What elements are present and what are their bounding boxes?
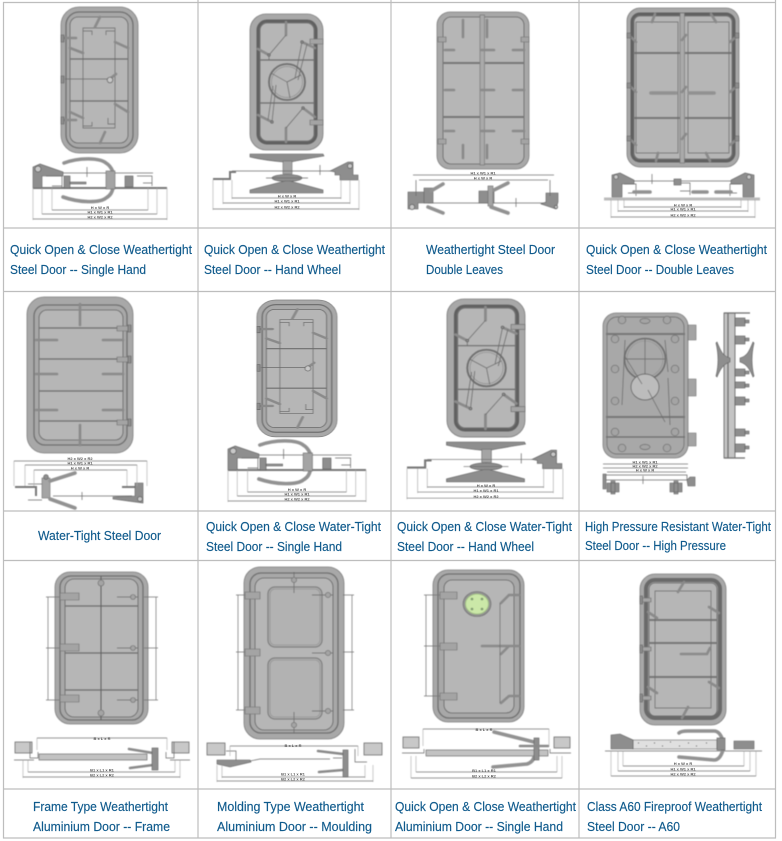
drawing: double leaf door elevation	[437, 12, 529, 169]
caption	[585, 519, 771, 553]
dimension labels: H1 x W1 x R1	[470, 170, 496, 176]
cell: class A60 fireproof	[587, 574, 762, 834]
dimension labels: H2 x W2 x R2	[473, 494, 499, 499]
dimension labels: H2 x W2 x R2	[67, 456, 93, 461]
caption: Quick Open & Close Weathertight	[10, 242, 192, 257]
dimension labels: H1 x W1 x R1	[67, 460, 93, 466]
caption: Quick Open & Close Weathertight	[395, 799, 576, 814]
dimension labels	[470, 170, 496, 180]
drawing: quick double leaf section	[604, 173, 760, 218]
dimension labels: H1 x W1 x R1	[473, 488, 499, 493]
dimension labels: H x W x R	[288, 487, 306, 492]
dimension labels: B2 x L2 x R2	[90, 772, 115, 778]
dimension labels: H x W x R	[674, 202, 692, 208]
dimension labels: B x L x R	[93, 736, 111, 741]
dimension labels	[67, 456, 93, 470]
drawing: aluminium single hand section	[402, 729, 571, 778]
caption: Steel Door -- Single Hand	[10, 262, 146, 277]
caption: Class A60 Fireproof Weathertight	[587, 799, 762, 814]
drawing: single hand door elevation	[61, 7, 138, 153]
cell: weathertight hand wheel	[204, 14, 385, 277]
drawing: water-tight door elevation	[27, 297, 133, 453]
dimension labels: H1 x W1 x R1	[670, 766, 696, 772]
drawing: water-tight section	[14, 461, 147, 508]
dimension labels: H1 x W1 x R1	[670, 206, 696, 212]
dimension labels: H2 x W2 x R2	[632, 464, 658, 468]
caption	[204, 242, 385, 277]
caption	[10, 242, 192, 277]
dimension labels: H1 x W1 x R1	[632, 460, 658, 464]
caption: Steel Door -- Double Leaves	[586, 262, 734, 277]
caption: Aluminium Door -- Single Hand	[395, 819, 563, 834]
drawing: moulding door elevation	[236, 567, 354, 739]
dimension labels: H x W x R	[674, 761, 692, 766]
dimension labels	[87, 205, 113, 220]
drawing: single hand section	[228, 441, 366, 502]
icon: porthole window	[463, 592, 491, 616]
caption	[206, 519, 381, 554]
dimension labels: B2 x L2 x R2	[472, 774, 497, 778]
caption: Steel Door -- Hand Wheel	[204, 262, 341, 277]
dimension labels: B1 x L1 x R1	[281, 772, 306, 776]
dimension labels: H2 x W2 x R2	[274, 204, 300, 210]
dimension labels	[90, 736, 115, 778]
cell: aluminium frame	[14, 572, 190, 834]
dimension labels	[632, 460, 658, 472]
drawing: aluminium single hand elevation	[424, 570, 524, 722]
cell: weathertight single hand	[10, 7, 192, 277]
dimension labels	[281, 743, 306, 782]
drawing: A60 door elevation	[640, 574, 726, 725]
cell: quick open double leaves	[586, 8, 767, 277]
drawing: frame door elevation	[46, 572, 158, 724]
caption: Quick Open & Close Weathertight	[204, 242, 385, 257]
caption: Double Leaves	[426, 262, 503, 277]
caption	[586, 242, 767, 277]
drawing: hand wheel section	[407, 442, 563, 499]
cell: water-tight steel door	[14, 297, 162, 543]
caption: Quick Open & Close Water-Tight	[397, 519, 572, 534]
dimension labels: H2 x W2 x R2	[670, 212, 696, 218]
dimension labels: H2 x W2 x R2	[87, 214, 113, 220]
caption: Steel Door -- Hand Wheel	[397, 539, 534, 554]
caption	[395, 799, 576, 834]
drawing: hand wheel door elevation	[447, 299, 525, 437]
dimension labels: H x W x R	[278, 194, 296, 198]
dimension labels	[472, 727, 497, 778]
dimension labels: H2 x W2 x R2	[284, 496, 310, 502]
cell: weathertight double leaves	[408, 12, 558, 277]
drawing: high pressure section	[603, 464, 695, 494]
caption: Steel Door -- Single Hand	[206, 539, 342, 554]
dimension labels: H x W x R	[71, 466, 89, 470]
caption: Aluminium Door -- Moulding	[217, 819, 372, 834]
caption: Frame Type Weathertight	[33, 799, 168, 814]
dimension labels: B2 x L2 x R2	[281, 776, 306, 782]
dimension labels: H x W x R	[636, 468, 654, 472]
drawing: high pressure door elevation	[603, 313, 696, 458]
dimension labels: H1 x W1 x R1	[274, 198, 300, 204]
drawing: hand wheel section	[213, 154, 359, 210]
dimension labels	[670, 202, 696, 218]
drawing: quick double leaf elevation	[627, 8, 739, 167]
caption	[587, 799, 762, 834]
dimension labels: H1 x W1 x R1	[284, 492, 310, 496]
caption: Steel Door -- A60	[587, 819, 680, 834]
dimension labels: H x W x R	[477, 483, 495, 488]
caption: Quick Open & Close Water-Tight	[206, 519, 381, 534]
dimension labels: B x L x R	[284, 743, 302, 748]
dimension labels: B1 x L1 x R1	[90, 768, 115, 772]
caption	[33, 799, 170, 834]
drawing: high pressure side view	[716, 313, 754, 458]
dimension labels: B1 x L1 x R1	[472, 768, 497, 773]
drawing: single hand section	[33, 159, 167, 220]
drawing: hand wheel door elevation	[250, 14, 323, 150]
caption: Weathertight Steel Door	[426, 242, 556, 257]
cell: water-tight hand wheel	[397, 299, 572, 554]
dimension labels: H x W x R	[91, 205, 109, 210]
drawing: moulding section	[207, 743, 382, 782]
caption: Water-Tight Steel Door	[38, 528, 162, 543]
dimension labels	[284, 487, 310, 502]
cell: high pressure water-tight	[585, 313, 771, 553]
dimension labels: H1 x W1 x R1	[87, 210, 113, 214]
dimension labels: H x W x R	[474, 176, 492, 180]
drawing: A60 section	[605, 731, 762, 776]
dimension labels: B x L x R	[475, 727, 493, 732]
caption: Steel Door -- High Pressure	[585, 538, 726, 553]
dimension labels	[473, 483, 499, 499]
caption: Molding Type Weathertight	[217, 799, 364, 814]
dimension labels	[670, 761, 696, 776]
caption: Quick Open & Close Weathertight	[586, 242, 767, 257]
caption	[397, 519, 572, 554]
dimension labels: H2 x W2 x R2	[670, 772, 696, 776]
drawing: single hand door elevation	[257, 300, 337, 437]
cell: aluminium moulding	[207, 567, 382, 834]
caption	[217, 799, 372, 834]
drawing: double leaf section	[408, 175, 558, 213]
caption: Aluminium Door -- Frame	[33, 819, 170, 834]
drawing: frame section	[14, 738, 190, 778]
dimension labels	[274, 194, 300, 210]
caption	[426, 242, 556, 277]
cell: aluminium single hand	[395, 570, 576, 834]
cell: water-tight single hand	[206, 300, 381, 554]
